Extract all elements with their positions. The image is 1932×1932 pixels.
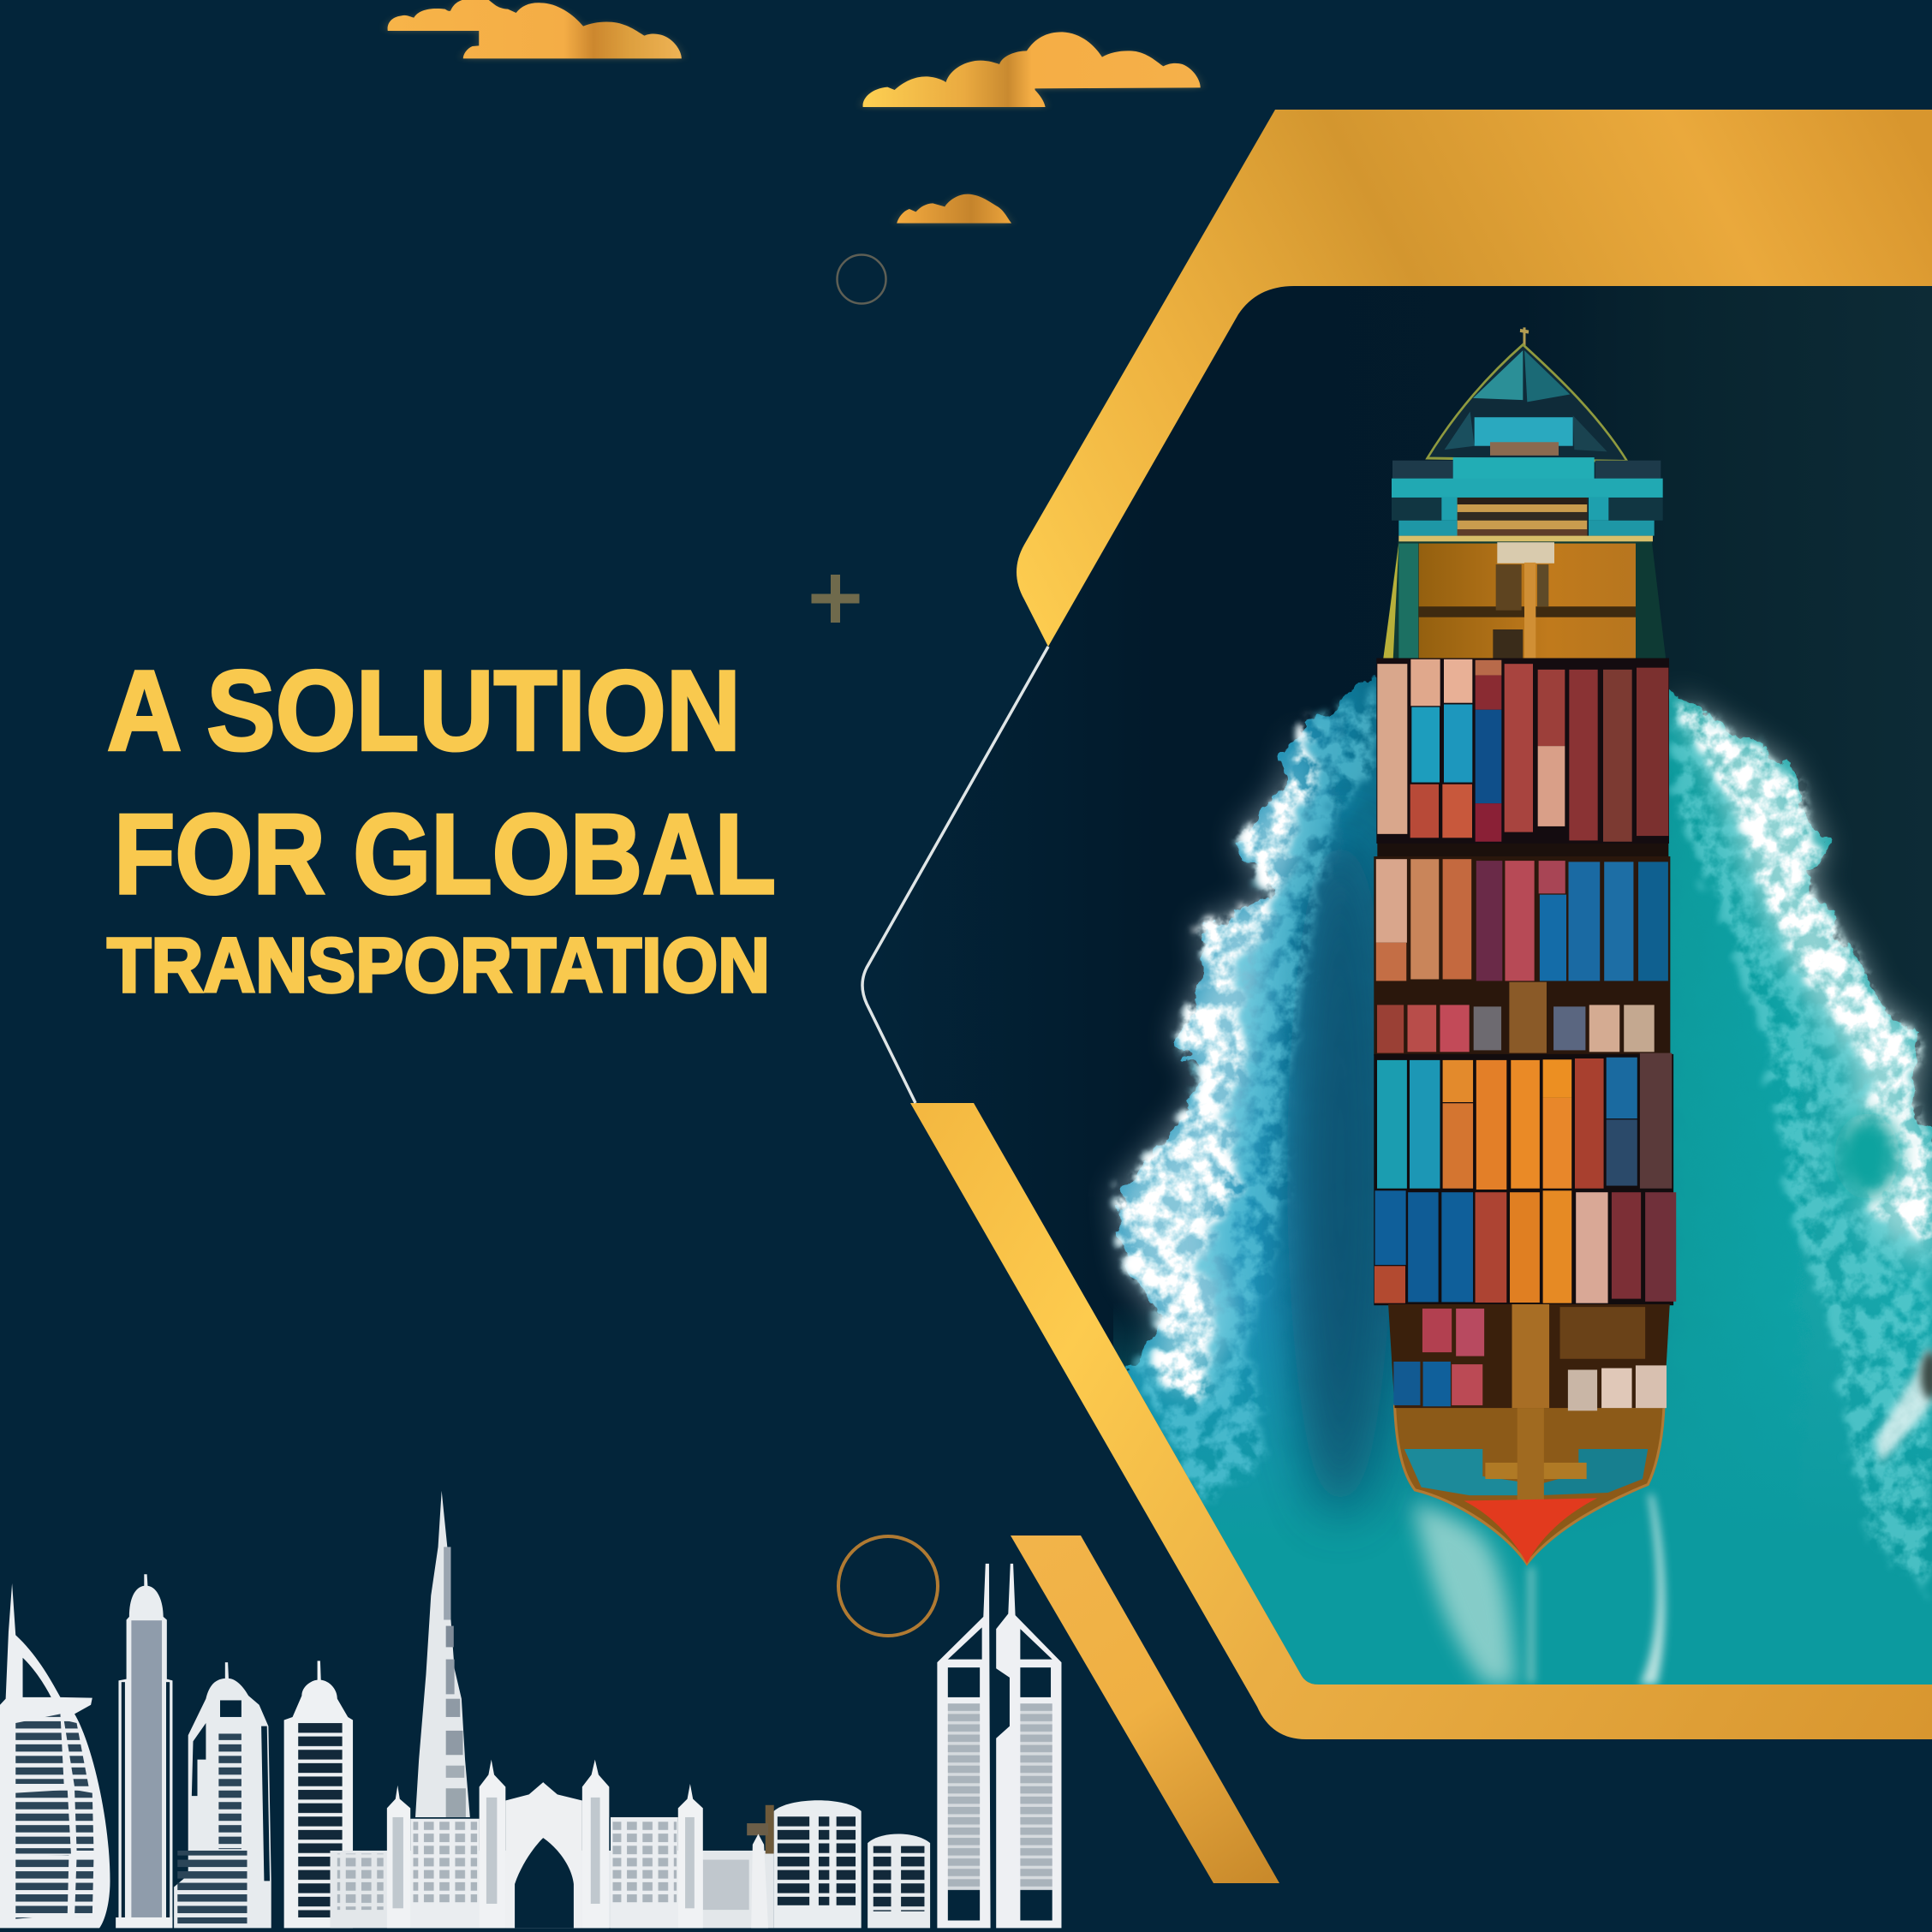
lower teal water [1113, 1302, 1932, 1696]
container row 0 [1376, 658, 1669, 844]
white foam right [1674, 695, 1932, 1250]
city skyline [0, 1491, 1061, 1928]
title line 2: FOR GLOBAL [114, 791, 776, 918]
bridge wings [1392, 461, 1453, 479]
container ship [1374, 327, 1676, 1564]
bridge lower [1392, 498, 1458, 521]
wake centre [1528, 1567, 1535, 1683]
white streak lower right [1875, 1345, 1932, 1464]
soft white foam underlay right [1674, 695, 1932, 1267]
mottled cyan foam right [1674, 694, 1932, 1593]
twin towers left [937, 1564, 991, 1928]
Burj Al Arab [0, 1583, 110, 1928]
bow deck [1428, 344, 1627, 462]
small spire and pole [747, 1805, 774, 1928]
curved tower [174, 1662, 271, 1928]
teal pool in foam [1834, 1113, 1899, 1199]
gold frame top [1017, 110, 1932, 647]
stern hull [1395, 1405, 1664, 1564]
small block [868, 1834, 930, 1928]
Atlantis hotel [331, 1760, 774, 1928]
container row 1 [1376, 859, 1668, 981]
soft white foam underlay left [1118, 728, 1302, 1396]
mast [1520, 327, 1529, 347]
container row 3 [1377, 1053, 1672, 1190]
wake left [1413, 1503, 1516, 1685]
hull shadow on water [1287, 831, 1393, 1516]
wake right [1640, 1494, 1665, 1685]
title line 3: TRANSPORTATION [107, 923, 770, 1009]
bridge turquoise deck [1453, 457, 1595, 480]
mottled cyan foam left [1118, 685, 1378, 1507]
cloud shape [863, 32, 1201, 107]
white foam left [1118, 724, 1319, 1404]
needle tower [116, 1574, 172, 1928]
small ring [838, 255, 886, 303]
hull forward [1383, 538, 1667, 670]
ocean water [1113, 675, 1932, 1721]
ship midships and stern [1374, 856, 1676, 1564]
title line 1: A SOLUTION [107, 647, 741, 774]
Burj Khalifa [415, 1491, 470, 1817]
round building [774, 1800, 862, 1928]
forward cargo deck [1419, 544, 1636, 664]
cloud group top right [863, 32, 1201, 107]
striped tower [284, 1661, 353, 1928]
white frame line [862, 647, 1048, 1103]
plus icon [812, 575, 860, 623]
cloud group top left [388, 0, 682, 58]
stern deck details [1404, 1449, 1539, 1495]
cloud shape [897, 194, 1011, 224]
ship bow and bridge [1376, 327, 1669, 861]
small cloud [897, 194, 1011, 224]
twin towers right [996, 1564, 1061, 1928]
diagonal gold bar [1011, 1535, 1279, 1883]
arch gateway [515, 1838, 574, 1928]
photo panel: container ship on ocean [1018, 286, 1932, 1685]
large ring [838, 1536, 938, 1636]
container row 2 [1377, 982, 1655, 1053]
red stern [1464, 1498, 1597, 1564]
title [107, 647, 776, 1009]
gold frame bottom [910, 1103, 1932, 1739]
container row 4 [1374, 1190, 1676, 1303]
dark rocks at right edge [1921, 1351, 1932, 1399]
dark sea [1018, 286, 1932, 1370]
midship base [1374, 856, 1670, 1056]
cloud shape [388, 0, 682, 58]
aft deck [1388, 1304, 1670, 1410]
